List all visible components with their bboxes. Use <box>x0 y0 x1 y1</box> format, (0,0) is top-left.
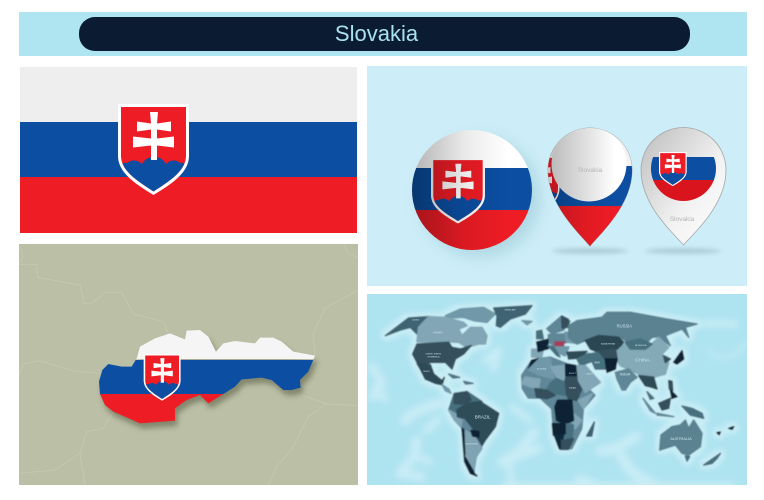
North America <box>385 306 532 393</box>
South America <box>449 392 499 476</box>
icon: location pin with flag disc <box>641 128 726 254</box>
country labels: CANADA <box>433 331 443 334</box>
title pill: Slovakia <box>335 21 419 46</box>
panel: national flag <box>20 67 357 233</box>
title pill <box>79 17 690 51</box>
panel: world map <box>367 294 747 487</box>
Oceania <box>643 390 734 465</box>
continents and countries <box>385 306 734 476</box>
Africa <box>522 357 595 449</box>
country labels: GREENLAND <box>504 309 516 312</box>
country labels: MONGOLIA <box>635 344 647 347</box>
marker label: Slovakia <box>670 216 695 223</box>
icon: coat of arms <box>118 104 189 195</box>
marker label: Slovakia <box>578 167 603 174</box>
country labels: SAUDI <box>586 373 593 376</box>
country labels: MEXICO <box>423 371 431 373</box>
panel: country location map <box>19 243 358 485</box>
country labels: AUSTRALIA <box>670 437 692 441</box>
ocean current patterns <box>372 324 747 487</box>
Europe <box>532 349 543 357</box>
country labels: BRAZIL <box>475 414 491 419</box>
country labels: RUSSIA <box>617 324 632 329</box>
country labels <box>412 309 692 446</box>
country labels: ALGERIA <box>537 368 547 371</box>
country shadow <box>102 335 318 429</box>
panel: map markers <box>367 66 747 286</box>
country labels: INDIA <box>620 372 631 377</box>
country labels: CHINA <box>635 358 650 363</box>
country labels: OF AMERICA <box>427 355 440 358</box>
country labels: SUDAN <box>569 387 576 390</box>
country labels: ALASKA <box>412 318 420 321</box>
country labels: IRAN <box>594 361 600 364</box>
country labels: KAZAKHSTAN <box>601 343 616 346</box>
header band <box>19 12 747 56</box>
country flag shape <box>99 330 315 424</box>
Asia <box>567 312 697 392</box>
icon: round flag badge <box>412 130 540 257</box>
country labels: ARGENTINA <box>466 443 478 446</box>
country labels: UNITED STATES <box>426 353 442 356</box>
country labels: EGYPT <box>569 373 576 375</box>
icon: location pin with flag base <box>548 128 632 256</box>
icon: coat of arms <box>144 354 181 401</box>
